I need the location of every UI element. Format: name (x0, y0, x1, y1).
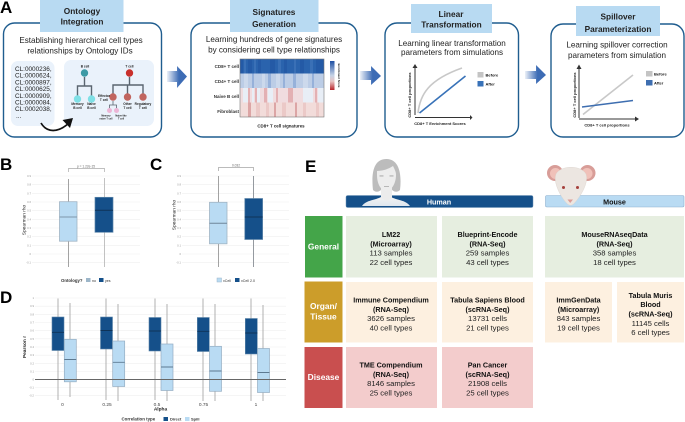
mouse header bar (546, 196, 684, 207)
box plot C: xCell comparison: -0.1 (176, 261, 181, 265)
card: ImmGenData (545, 282, 612, 342)
ontology ID list: ... (16, 113, 22, 120)
box plot D: alpha: Correlation type (122, 416, 156, 422)
box plot D: alpha: 0 (61, 402, 64, 408)
cell type hierarchy tree (64, 60, 154, 126)
card: Immune Compendium: (RNA-Seq) (373, 305, 410, 314)
box plot C: xCell comparison: 0.2 (177, 235, 181, 239)
card: TME Compendium: (RNA-Seq) (373, 370, 410, 379)
row label: organ/tissue (304, 282, 342, 342)
row label: organ/tissue: Organ/ (310, 301, 338, 311)
card: MouseRNAseqData (545, 216, 684, 278)
row label: disease: Disease (308, 372, 340, 382)
line chart: before and after spillover correction: Before (654, 72, 667, 76)
box plot B: ontology: no (92, 279, 96, 283)
mouse header bar: Mouse (603, 197, 626, 206)
card: Immune Compendium: 40 cell types (370, 323, 413, 332)
description: linear transformation: Learning linear transformation (398, 39, 506, 48)
box plot B: ontology: 0.4 (27, 217, 31, 221)
card: LM22 (346, 216, 437, 278)
card: ImmGenData: 19 cell types (557, 323, 600, 332)
box plot B: ontology: -0.1 (26, 261, 31, 265)
box plot D: alpha: 0.1 (30, 370, 34, 374)
box plot D: alpha: Spill (191, 416, 199, 422)
description: signatures generation (206, 35, 342, 54)
row label: general: General (308, 242, 339, 252)
card: Blueprint-Encode: 43 cell types (466, 258, 509, 267)
box plot D: alpha: 0.7 (30, 320, 34, 324)
card: Immune Compendium: 3626 samples (367, 314, 415, 323)
card: Immune Compendium (346, 282, 437, 342)
ontology ID list: CL:0000084, (15, 100, 52, 106)
description: ontology integration (19, 36, 143, 56)
cell type hierarchy tree: Regulatory (135, 102, 152, 106)
heading: spillover parameterization: Parameterization (585, 24, 651, 34)
card: TME Compendium (346, 347, 437, 408)
box plot D: alpha: 1 (255, 402, 258, 408)
line chart: before and after linear transformation: CD8+ T cell proportions (407, 72, 412, 118)
box plot D: alpha: 0.75 (199, 402, 208, 408)
cell type hierarchy tree: T cell (100, 98, 108, 102)
box plot D: alpha: 0 (32, 378, 34, 382)
heading: ontology integration (40, 0, 124, 32)
arrow (167, 66, 187, 88)
arrow (525, 65, 546, 84)
box plot D: alpha: 0.6 (30, 329, 34, 333)
card: Tabula Muris Blood: Tabula Muris (629, 291, 672, 300)
box plot D: alpha: Pearson r (22, 336, 28, 358)
icon: human (362, 159, 410, 206)
card: ImmGenData: ImmGenData (556, 296, 602, 304)
ontology ID list: CL:0002038, (15, 106, 52, 113)
panel label C: C (150, 155, 162, 174)
box plot C: xCell comparison: xCell (223, 279, 231, 283)
heading: spillover parameterization (576, 6, 660, 36)
row label: general (305, 216, 342, 278)
box plot D: alpha: 0.5 (154, 402, 161, 408)
box plot D: alpha: -0.1 (29, 386, 34, 390)
card: TME Compendium: TME Compendium (359, 360, 423, 370)
box plot D: alpha: Alpha (154, 406, 167, 412)
heading: ontology integration: Ontology (64, 6, 101, 16)
card: Tabula Muris Blood: (scRNA-Seq) (629, 310, 673, 318)
card: Pan Cancer: (scRNA-Seq) (466, 370, 510, 379)
cell type hierarchy tree: Naive (87, 102, 96, 106)
box plot C: xCell comparison: 0.8 (177, 183, 181, 187)
panel: spillover parameterization (551, 6, 684, 137)
row label: organ/tissue: Tissue (310, 312, 337, 322)
heading: signatures generation (230, 0, 318, 32)
card: MouseRNAseqData: 358 samples (593, 248, 636, 258)
box plot C: xCell comparison: xCell 2.0 (241, 279, 255, 283)
cell type hierarchy tree: Naive-like (115, 114, 127, 118)
description: ontology integration: relationships by Ontology IDs (27, 46, 133, 56)
cell type hierarchy tree: Other (123, 102, 133, 106)
box plot D: alpha: Direct (170, 416, 182, 422)
box plot D: alpha: 0.3 (30, 353, 34, 357)
panel label E: E (305, 157, 316, 176)
icon: mouse (547, 165, 596, 205)
card: Pan Cancer: 25 cell types (466, 388, 509, 397)
card: TME Compendium: 25 cell types (370, 388, 413, 397)
card: Tabula Sapiens Blood: 21 cell types (466, 323, 509, 332)
line chart: before and after spillover correction: CD8+ T cell proportions (584, 122, 630, 128)
cell type hierarchy tree: Memory (101, 114, 111, 118)
heading: linear transformation (411, 4, 492, 33)
cell type hierarchy tree: T cell (139, 106, 147, 110)
card: Pan Cancer: 21908 cells (468, 379, 507, 388)
card: ImmGenData: (Microarray) (558, 305, 600, 314)
box plot D: alpha: -0.2 (29, 394, 34, 398)
description: linear transformation (398, 39, 506, 57)
cell type hierarchy tree: B cell (87, 106, 96, 110)
ontology ID list (11, 61, 54, 126)
heading: signatures generation: Generation (252, 19, 296, 29)
box plot C: xCell comparison: 0.032 (232, 164, 240, 168)
card: Immune Compendium: Immune Compendium (353, 296, 429, 304)
panel label B: B (0, 155, 12, 174)
heatmap colour legend: Enrichment Score (337, 64, 341, 88)
box plot D: alpha: 0.9 (30, 304, 34, 308)
box plot B: ontology: 0.3 (27, 226, 31, 230)
ontology ID list: CL:0000909, (15, 93, 52, 100)
arrow (360, 66, 381, 85)
card: Tabula Muris Blood (617, 282, 684, 342)
heatmap row labels (214, 64, 239, 114)
box plot B: ontology: 0.2 (27, 235, 31, 239)
card: Tabula Muris Blood: 11145 cells (632, 319, 670, 328)
heatmap row labels: Fibroblast (217, 109, 239, 114)
heading: ontology integration: Integration (61, 16, 103, 26)
description: linear transformation: parameters from simulations (401, 48, 503, 57)
cell type hierarchy tree: T cell (123, 106, 132, 110)
human header bar: Human (427, 198, 451, 206)
heatmap (240, 59, 324, 117)
box plot B: ontology: yes (105, 279, 111, 283)
cell type hierarchy tree: naive T cell (100, 118, 113, 120)
card: Tabula Sapiens Blood (442, 282, 533, 342)
card: TME Compendium: 8146 samples (367, 379, 415, 388)
heatmap row labels: Naive B cell (214, 94, 239, 99)
box plot C: xCell comparison (172, 164, 289, 283)
panel: ontology integration (4, 0, 162, 137)
card: Blueprint-Encode (442, 216, 533, 278)
heading: linear transformation: Linear (439, 9, 464, 19)
heatmap row labels: CD4+ T cell (215, 79, 239, 84)
box plot C: xCell comparison: 0.1 (177, 243, 181, 247)
card: LM22: (Microarray) (370, 240, 412, 248)
card: Blueprint-Encode: (RNA-Seq) (470, 240, 506, 248)
card: MouseRNAseqData: MouseRNAseqData (581, 230, 649, 239)
line chart: before and after linear transformation: After (486, 82, 495, 86)
heatmap row labels: CD8+ T cell (215, 64, 239, 69)
description: signatures generation: by considering cell type relationships (208, 46, 340, 54)
description: signatures generation: Learning hundreds of gene signatures (206, 35, 342, 44)
description: spillover parameterization: Learning spillover correction (566, 40, 668, 50)
row label: disease (304, 347, 342, 408)
box plot B: ontology: p = 1.22e-15 (77, 164, 95, 168)
box plot C: xCell comparison: 0.7 (177, 191, 181, 195)
description: ontology integration: Establishing hierarchical cell types (19, 36, 143, 45)
box plot D: alpha: 0.2 (30, 361, 34, 365)
icon: curved black arrow (41, 118, 73, 130)
card: Pan Cancer (442, 347, 533, 408)
ontology ID list: CL:0000236, (15, 66, 52, 73)
card: Tabula Sapiens Blood: 13731 cells (468, 314, 507, 323)
box plot B: ontology (22, 164, 140, 283)
box plot C: xCell comparison: 0.9 (177, 174, 181, 178)
line chart: before and after linear transformation: CD8+ T Enrichment Scores (414, 121, 467, 126)
ontology ID list: CL:0000624, (15, 73, 52, 80)
panel: linear transformation (385, 4, 518, 137)
heading: signatures generation: Signatures (253, 7, 296, 17)
card: MouseRNAseqData: 18 cell types (593, 258, 636, 267)
box plot B: ontology: Spearman rho (22, 204, 28, 235)
panel label D: D (0, 288, 12, 307)
heading: linear transformation: Transformation (421, 20, 482, 30)
box plot B: ontology: Ontology? (61, 278, 83, 283)
line chart: before and after linear transformation (407, 64, 499, 126)
cell type hierarchy tree: Effector (98, 94, 111, 98)
box plot C: xCell comparison: 0.3 (177, 226, 181, 230)
box plot D: alpha: 1 (32, 296, 34, 300)
card: LM22: LM22 (382, 230, 400, 239)
box plot C: xCell comparison: Spearman rho (172, 199, 178, 230)
box plot C: xCell comparison: 0 (179, 252, 181, 256)
heatmap x axis label: CD8+ T cell signatures (257, 124, 305, 128)
heatmap colour legend (330, 61, 341, 90)
box plot D: alpha: 0.8 (30, 312, 34, 316)
box plot D: alpha: 0.4 (30, 345, 34, 349)
line chart: before and after spillover correction (572, 64, 667, 128)
card: ImmGenData: 843 samples (557, 314, 600, 323)
box plot D: alpha: 0.25 (102, 402, 112, 408)
line chart: before and after spillover correction: CD8+ T cell proportions (572, 72, 577, 118)
cell type hierarchy tree: Memory (71, 102, 84, 106)
card: Tabula Sapiens Blood: (scRNA-Seq) (466, 305, 510, 314)
cell type hierarchy tree: T cell (125, 64, 134, 68)
box plot C: xCell comparison: 0.5 (177, 209, 181, 213)
card: Tabula Sapiens Blood: Tabula Sapiens Blood (450, 296, 525, 304)
card: Tabula Muris Blood: 6 cell types (631, 328, 670, 337)
box plot D: alpha (22, 296, 286, 422)
box plot B: ontology: 0.7 (27, 191, 31, 195)
card: Tabula Muris Blood: Blood (640, 300, 661, 309)
card: MouseRNAseqData: (RNA-Seq) (597, 240, 633, 248)
card: Pan Cancer: Pan Cancer (468, 360, 507, 370)
box plot B: ontology: 0.5 (27, 209, 31, 213)
box plot C: xCell comparison: 0.6 (177, 200, 181, 204)
card: Blueprint-Encode: Blueprint-Encode (458, 230, 517, 239)
line chart: before and after spillover correction: After (654, 80, 664, 86)
box plot B: ontology: 0.9 (27, 174, 31, 178)
heading: spillover parameterization: Spillover (600, 12, 636, 22)
description: spillover parameterization: parameters from simulation (568, 51, 666, 60)
panel: signatures generation (191, 0, 357, 137)
cell type hierarchy tree: B cell (81, 64, 89, 68)
box plot D: alpha: 0.5 (30, 337, 34, 341)
box plot B: ontology: 0.6 (27, 200, 31, 204)
cell type hierarchy tree: B cell (73, 106, 82, 110)
human header bar (346, 196, 533, 208)
box plot B: ontology: 0 (29, 252, 31, 256)
ontology ID list: CL:0000897, (15, 79, 52, 86)
card: LM22: 113 samples (369, 248, 413, 258)
card: Blueprint-Encode: 259 samples (466, 248, 509, 258)
description: spillover parameterization (566, 40, 668, 60)
box plot C: xCell comparison: 0.4 (177, 217, 181, 221)
box plot B: ontology: 0.8 (27, 183, 31, 187)
cell type hierarchy tree: T cell (118, 118, 124, 120)
line chart: before and after linear transformation: Before (486, 72, 499, 78)
box plot B: ontology: 0.1 (27, 243, 31, 247)
card: LM22: 22 cell types (370, 258, 413, 267)
ontology ID list: CL:0000625, (15, 86, 52, 93)
